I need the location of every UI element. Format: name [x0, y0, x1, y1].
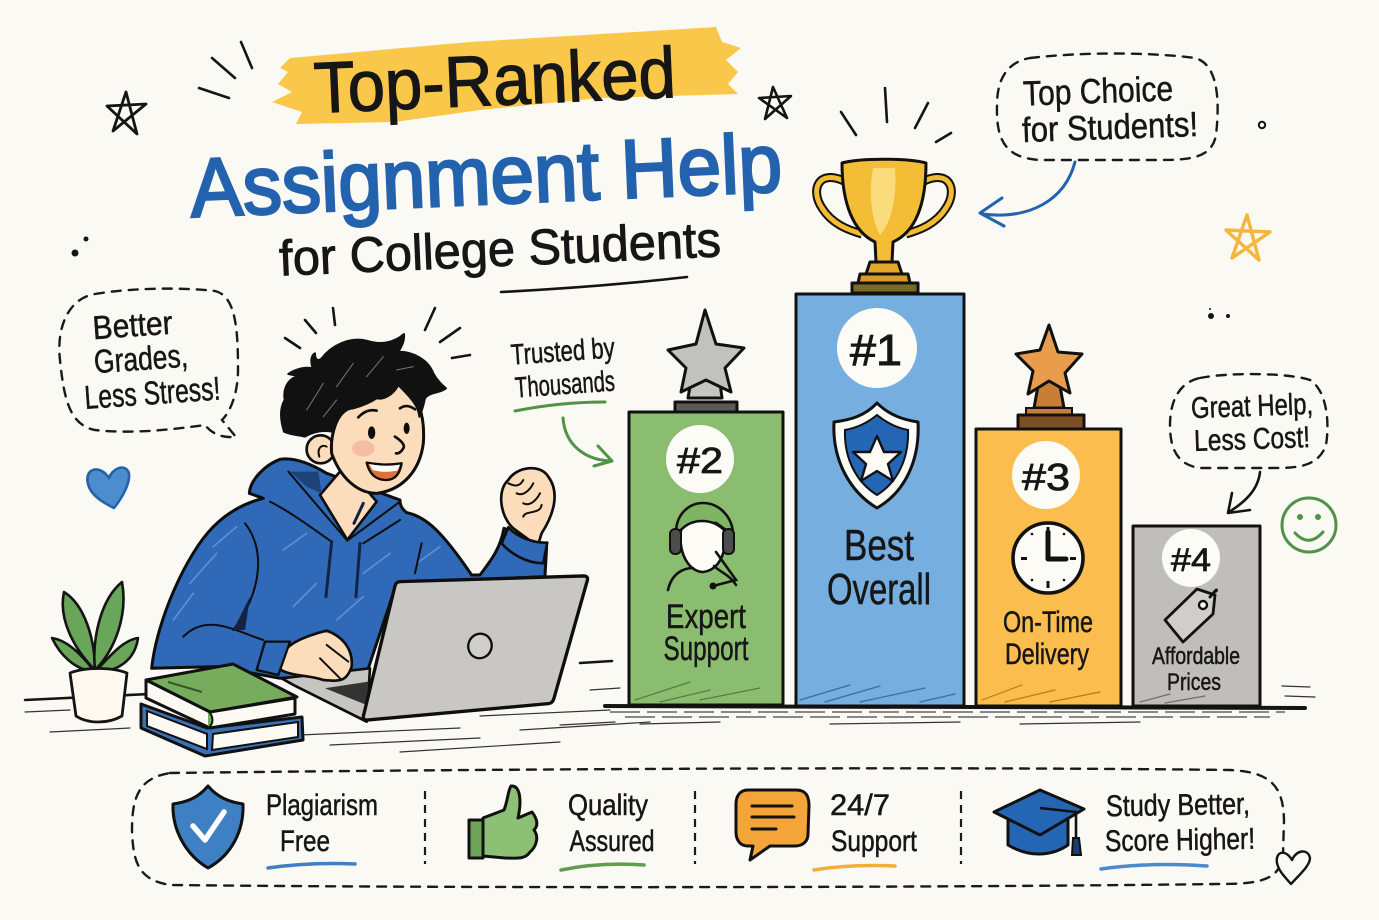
title underline: [501, 277, 687, 292]
shield star icon: [834, 403, 918, 508]
label: Score Higher!: [1105, 823, 1255, 858]
trusted by thousands note: [510, 332, 616, 411]
podium label: Overall: [827, 565, 931, 614]
blue underline: [1101, 865, 1207, 869]
star doodle yellow: [1226, 215, 1270, 260]
rank badge: [666, 425, 734, 493]
shield check icon: [173, 786, 243, 868]
hoodie texture: [173, 527, 440, 620]
potted plant: [52, 582, 138, 722]
label: [1105, 788, 1255, 858]
label: Plagiarism: [266, 789, 378, 822]
label: Support: [831, 825, 918, 858]
sleeve cuff: [257, 642, 290, 675]
green book: [146, 664, 297, 728]
eyes: [368, 423, 410, 439]
title highlight brush: [272, 27, 741, 124]
orange underline: [814, 866, 895, 870]
blue heart: [87, 468, 129, 508]
podium label: Expert: [666, 598, 746, 636]
eyebrows and nose: [358, 406, 415, 453]
rank badge: [837, 308, 917, 388]
features strip: [132, 768, 1284, 887]
title spark lines: [199, 42, 252, 98]
student illustration: [152, 334, 588, 722]
green underline: [515, 402, 605, 411]
feature: plagiarism free: [173, 786, 378, 868]
callout text: Grades,: [93, 337, 189, 380]
arrow to podium 4: [1228, 472, 1260, 513]
dots right: [1208, 308, 1230, 319]
label: [568, 789, 654, 858]
title block: [188, 27, 784, 292]
podium label: Prices: [1167, 669, 1221, 696]
podium label: Affordable: [1152, 643, 1240, 670]
rank badge: [1162, 529, 1220, 587]
laptop keyboard base: [282, 668, 370, 722]
cuff: [502, 527, 547, 563]
podium #4: #4: [1171, 542, 1211, 578]
callout text: Better: [91, 304, 174, 346]
arm fold lines: [183, 523, 422, 640]
ear: [307, 435, 335, 463]
laptop logo: [465, 630, 495, 662]
laptop lid: [363, 576, 588, 720]
arrow to trophy: [980, 162, 1075, 226]
feature: study better: [994, 788, 1255, 869]
hood front: [270, 472, 400, 543]
price tag icon: [1165, 589, 1217, 642]
student spark lines: [285, 308, 470, 358]
green underline: [561, 864, 644, 870]
podium label: Delivery: [1005, 638, 1089, 671]
callout: top choice: [997, 54, 1218, 160]
raised fist: [501, 468, 555, 547]
podium #3: #3: [1022, 457, 1070, 499]
graduation cap icon: [994, 790, 1084, 855]
title line: Top-Ranked: Top-Ranked: [312, 33, 677, 129]
star doodle top: [759, 87, 791, 119]
trusted by thousands note: Thousands: [514, 366, 616, 404]
clock icon: [1013, 523, 1083, 593]
podium #2: [629, 412, 783, 705]
bronze star award: [1016, 325, 1084, 429]
table line: [25, 661, 1315, 752]
callout text: for Students!: [1021, 105, 1199, 150]
podium label: [664, 598, 749, 668]
dots left: [72, 236, 88, 256]
podium label: On-Time: [1003, 606, 1093, 639]
callout text: Great Help,: [1191, 388, 1314, 425]
hand on laptop: [278, 631, 352, 681]
label: Quality: [568, 789, 648, 822]
podium #1: #1: [850, 326, 902, 375]
trophy rays: [841, 88, 951, 142]
callout: great help: [1170, 374, 1327, 468]
hair: [281, 334, 446, 437]
podium label: Best: [844, 521, 914, 570]
podium #3: [976, 429, 1121, 706]
feature: quality assured: [469, 786, 654, 870]
rank badge: [1012, 441, 1080, 509]
hair strands: [307, 357, 413, 417]
label: 24/7: [830, 789, 890, 822]
label: [830, 789, 918, 858]
callout text: [1191, 388, 1314, 458]
outline heart: [1277, 851, 1310, 884]
blue underline: [268, 864, 355, 868]
stack of books: [141, 664, 303, 756]
leaves: [52, 582, 138, 672]
pot: [70, 668, 127, 722]
podium #4: [1133, 526, 1260, 706]
callout text: [1021, 69, 1199, 150]
label: Assured: [570, 825, 654, 858]
callout text: Less Cost!: [1194, 421, 1311, 458]
ring dot: [1259, 122, 1265, 128]
podium #2: #2: [677, 440, 723, 481]
silver star award: [668, 310, 744, 412]
title line: for College Students: for College Students: [278, 211, 722, 287]
title line: Assignment Help: Assignment Help: [188, 116, 784, 235]
callout text: Top Choice: [1022, 69, 1174, 114]
thumbs up icon: [469, 786, 537, 858]
drawstrings: [326, 503, 363, 597]
chat bubble icon: [736, 790, 809, 860]
hoodie: [152, 459, 547, 678]
cheek: [352, 440, 375, 456]
label: Free: [280, 825, 330, 858]
podium label: [1152, 643, 1240, 696]
green smiley: [1282, 498, 1336, 552]
label: [266, 789, 378, 858]
podium #1: [796, 294, 964, 706]
face: [331, 382, 424, 493]
callout text: Less Stress!: [83, 370, 221, 416]
callout text: [78, 301, 221, 416]
podium label: Support: [664, 630, 749, 668]
label: Study Better,: [1106, 788, 1250, 823]
podium label: [827, 521, 931, 614]
mouth: [367, 463, 402, 480]
callout: better grades: [59, 289, 238, 437]
gold trophy: [817, 159, 951, 293]
trusted by thousands note: Trusted by: [510, 332, 616, 372]
podium label: [1003, 606, 1093, 671]
dividers: [425, 791, 961, 864]
blue book: [141, 704, 303, 756]
green arrow: [563, 418, 612, 466]
neck and collar: [320, 472, 377, 540]
feature: 24/7 support: [736, 789, 918, 870]
star doodle left: [107, 92, 146, 134]
headset agent icon: [668, 503, 736, 590]
